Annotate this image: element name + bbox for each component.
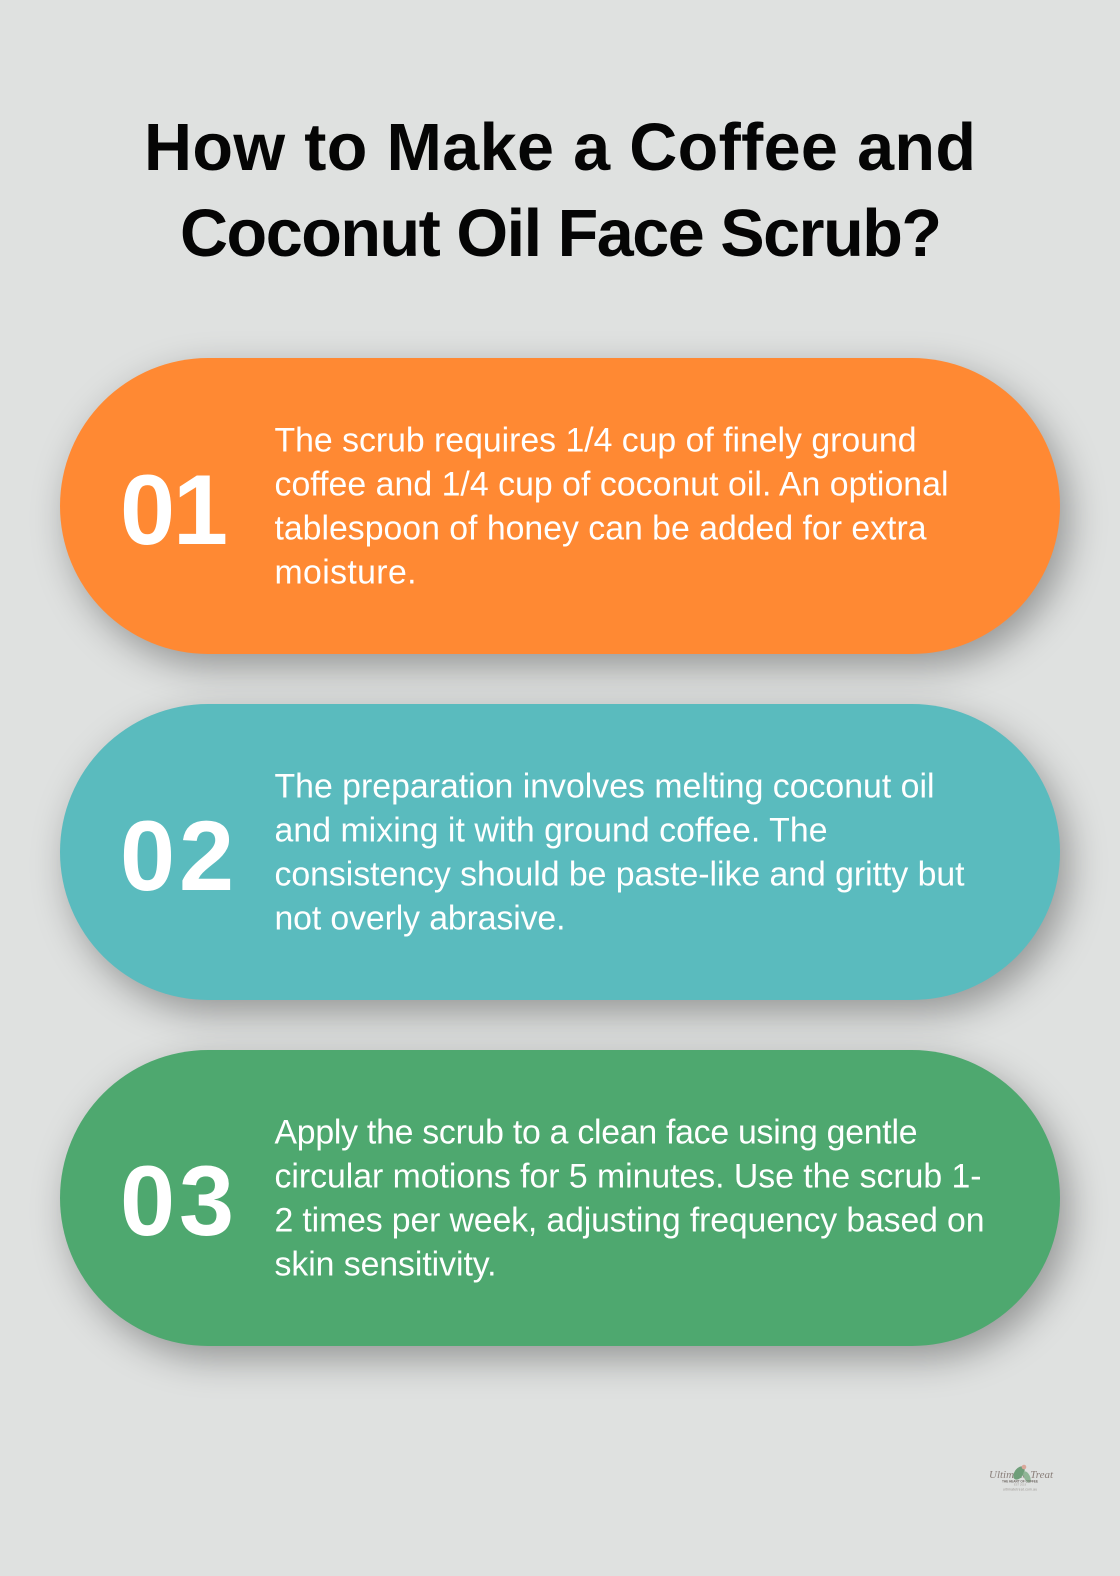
logo leaves icon bbox=[1011, 1464, 1032, 1484]
step number 01: 01 bbox=[120, 454, 228, 565]
step 01 description bbox=[274, 422, 948, 592]
step 02 description: and mixing it with ground coffee. The bbox=[274, 812, 828, 850]
logo wordmark: Ultimate Treat bbox=[989, 1469, 1054, 1481]
step 03 description: circular motions for 5 minutes. Use the scrub 1- bbox=[274, 1158, 982, 1196]
orange pill background bbox=[60, 358, 1060, 654]
step 03 description bbox=[274, 1114, 984, 1284]
panel: step 03 bbox=[60, 1050, 1060, 1346]
teal pill background bbox=[60, 704, 1060, 1000]
step 02 description: consistency should be paste-like and gritty but bbox=[274, 856, 965, 894]
panel: step 01 bbox=[60, 358, 1060, 654]
step 03 description: Apply the scrub to a clean face using gentle bbox=[274, 1114, 918, 1152]
step 02 description: not overly abrasive. bbox=[274, 900, 566, 938]
title bbox=[144, 111, 976, 271]
logo: Ultimate Treat bbox=[989, 1464, 1054, 1492]
step number 03: 03 bbox=[120, 1145, 234, 1256]
step 01 description: tablespoon of honey can be added for extra bbox=[274, 510, 927, 548]
logo established: EST 2019 bbox=[1014, 1484, 1027, 1486]
logo url: ultimatetreat.com.au bbox=[1003, 1488, 1037, 1492]
step 03 description: 2 times per week, adjusting frequency based on bbox=[274, 1202, 984, 1240]
step 02 description bbox=[274, 768, 965, 938]
step 01 description: moisture. bbox=[274, 554, 416, 592]
logo tagline: THE HEART OF COFFEE bbox=[1002, 1480, 1038, 1484]
step 03 description: skin sensitivity. bbox=[274, 1246, 496, 1284]
green pill background bbox=[60, 1050, 1060, 1346]
title: How to Make a Coffee and bbox=[144, 111, 976, 185]
step 01 description: The scrub requires 1/4 cup of finely ground bbox=[274, 422, 916, 460]
step 02 description: The preparation involves melting coconut oil bbox=[274, 768, 934, 806]
title: Coconut Oil Face Scrub? bbox=[180, 197, 942, 271]
step number 02: 02 bbox=[120, 800, 234, 911]
panel: step 02 bbox=[60, 704, 1060, 1000]
step 01 description: coffee and 1/4 cup of coconut oil. An optional bbox=[274, 466, 948, 504]
